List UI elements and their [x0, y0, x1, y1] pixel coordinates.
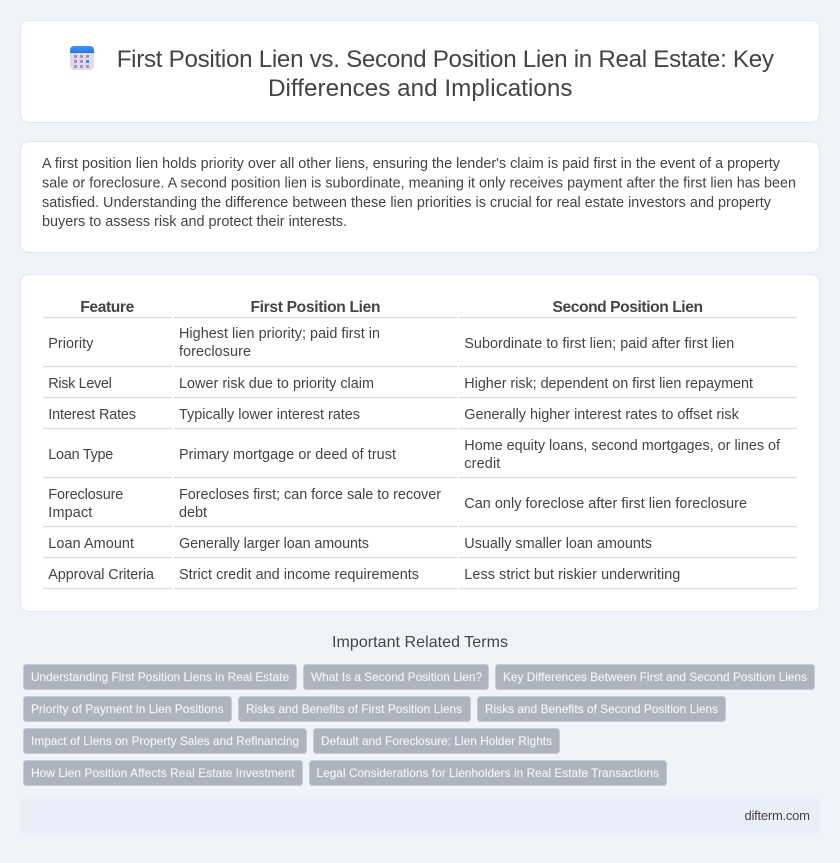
- row: priority: Priority: [48, 336, 94, 352]
- title: [117, 46, 775, 102]
- row: foreclosure impact: debt: [179, 505, 207, 521]
- row: interest rates: Interest Rates: [48, 407, 136, 423]
- tag cloud: related terms: Risks and Benefits of First Position Liens: [246, 702, 462, 716]
- row: approval criteria: Less strict but riskier underwriting: [464, 567, 680, 583]
- tag cloud: related terms: Impact of Liens on Property Sales and Refinancing: [31, 734, 299, 748]
- row: foreclosure impact: Forecloses first; can force sale to recover: [179, 487, 441, 503]
- row: loan amount: Generally larger loan amounts: [179, 536, 369, 552]
- table header: Feature: [80, 299, 135, 316]
- row: approval criteria: Strict credit and income requirements: [179, 567, 419, 583]
- row: approval criteria: Approval Criteria: [48, 567, 154, 583]
- text block: definition: [42, 156, 796, 230]
- panel: intro paragraph: [20, 142, 820, 252]
- row: interest rates: Generally higher interest rates to offset risk: [464, 407, 740, 423]
- row: loan amount: Usually smaller loan amounts: [464, 536, 652, 552]
- text block: definition: satisfied. Understanding the difference between these lien priorities is crucial for real estate investors and property: [42, 195, 772, 211]
- row: priority: [48, 326, 734, 360]
- row: foreclosure impact: Can only foreclose after first lien foreclosure: [464, 496, 747, 512]
- row: foreclosure impact: Impact: [48, 505, 92, 521]
- title: First Position Lien vs. Second Position Lien in Real Estate: Key: [117, 46, 775, 73]
- tag cloud: related terms: [24, 664, 814, 786]
- row: priority: foreclosure: [179, 344, 251, 360]
- row: loan type: [48, 438, 781, 472]
- row: loan type: credit: [464, 456, 500, 472]
- footer: difterm.com: [744, 808, 810, 823]
- text block: definition: buyers to assess risk and protect their interests.: [42, 214, 347, 230]
- row: interest rates: [48, 407, 740, 423]
- panel: comparison table: [20, 274, 820, 612]
- text block: definition: sale or foreclosure. A second position lien is subordinate, meaning it only receives payment after the first lien has been: [42, 176, 796, 192]
- tag cloud: related terms: Default and Foreclosure: Lien Holder Rights: [321, 734, 552, 748]
- row: risk level: Higher risk; dependent on first lien repayment: [464, 376, 753, 392]
- tag cloud: related terms: Risks and Benefits of Second Position Liens: [485, 702, 718, 716]
- table header: Second Position Lien: [552, 299, 703, 316]
- row: priority: Highest lien priority; paid first in: [179, 326, 380, 342]
- row: foreclosure impact: [48, 487, 747, 521]
- tag cloud: related terms: How Lien Position Affects Real Estate Investment: [31, 766, 295, 780]
- row: risk level: Lower risk due to priority claim: [179, 376, 374, 392]
- tag cloud: related terms: Legal Considerations for Lienholders in Real Estate Transactions: [316, 766, 659, 780]
- tag cloud: related terms: What Is a Second Position Lien?: [311, 670, 482, 684]
- tag cloud: related terms: Priority of Payment in Lien Positions: [31, 702, 224, 716]
- row: loan type: Home equity loans, second mortgages, or lines of: [464, 438, 781, 454]
- tag cloud: related terms: Key Differences Between First and Second Position Liens: [503, 670, 807, 684]
- table header: [80, 299, 703, 316]
- panel: title header: [20, 20, 820, 122]
- row: priority: Subordinate to first lien; paid after first lien: [464, 336, 734, 352]
- row: loan amount: Loan Amount: [48, 536, 134, 552]
- title: Differences and Implications: [268, 75, 572, 102]
- row: approval criteria: [48, 567, 680, 583]
- row: foreclosure impact: Foreclosure: [48, 487, 123, 503]
- row: loan type: Loan Type: [48, 447, 113, 463]
- row: interest rates: Typically lower interest rates: [179, 407, 360, 423]
- text block: definition: A first position lien holds priority over all other liens, ensuring the lender's claim is paid first in the event of a property: [42, 156, 781, 172]
- tag cloud: related terms: Understanding First Position Liens in Real Estate: [31, 670, 289, 684]
- row: loan type: Primary mortgage or deed of trust: [179, 447, 396, 463]
- row: risk level: Risk Level: [48, 376, 112, 392]
- icon: calendar: [70, 46, 94, 70]
- heading: related terms: Important Related Terms: [332, 634, 508, 651]
- row: risk level: [48, 376, 753, 392]
- footer: [20, 799, 820, 833]
- table header: First Position Lien: [250, 299, 380, 316]
- row: loan amount: [48, 536, 652, 552]
